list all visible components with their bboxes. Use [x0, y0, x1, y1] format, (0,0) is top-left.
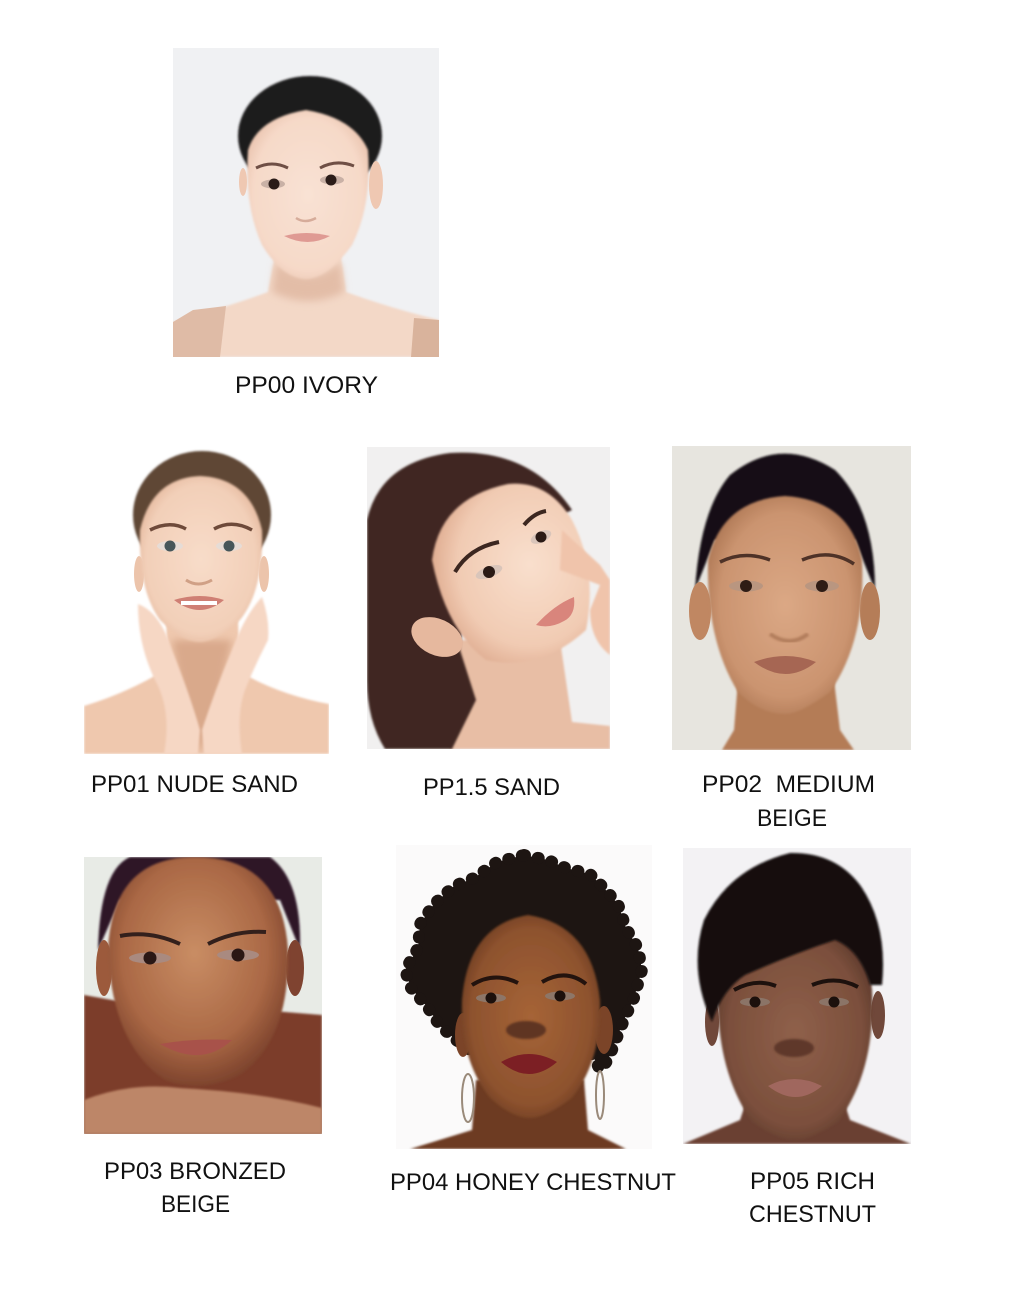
- label: PP04 Honey Chestnut: PP04 HONEY CHESTNUT: [390, 1169, 676, 1196]
- label: PP01 Nude Sand: PP01 NUDE SAND: [91, 771, 298, 798]
- label: PP02 Medium Beige: BEIGE: [757, 805, 827, 832]
- shade guide page: [84, 48, 911, 1222]
- label: PP03 Bronzed Beige: [104, 1158, 286, 1218]
- portrait: PP02 Medium Beige: [672, 446, 911, 750]
- portrait: PP05 Rich Chestnut: [683, 848, 911, 1144]
- portrait: PP04 Honey Chestnut: [396, 845, 652, 1149]
- label: PP00 Ivory: PP00 IVORY: [235, 372, 378, 399]
- label: PP05 Rich Chestnut: [749, 1168, 876, 1228]
- label: PP02 Medium Beige: PP02 MEDIUM: [702, 771, 875, 798]
- label: PP1.5 Sand: PP1.5 SAND: [423, 774, 560, 801]
- label: PP05 Rich Chestnut: PP05 RICH: [750, 1168, 875, 1195]
- label: PP03 Bronzed Beige: BEIGE: [161, 1191, 230, 1218]
- portrait: PP03 Bronzed Beige: [84, 857, 322, 1134]
- portrait: PP01 Nude Sand: [84, 448, 329, 754]
- portrait: PP00 Ivory: [173, 48, 439, 357]
- label: PP02 Medium Beige: [702, 771, 875, 832]
- label: PP03 Bronzed Beige: PP03 BRONZED: [104, 1158, 286, 1185]
- label: PP05 Rich Chestnut: CHESTNUT: [749, 1201, 876, 1228]
- portrait: PP1.5 Sand: [367, 447, 610, 749]
